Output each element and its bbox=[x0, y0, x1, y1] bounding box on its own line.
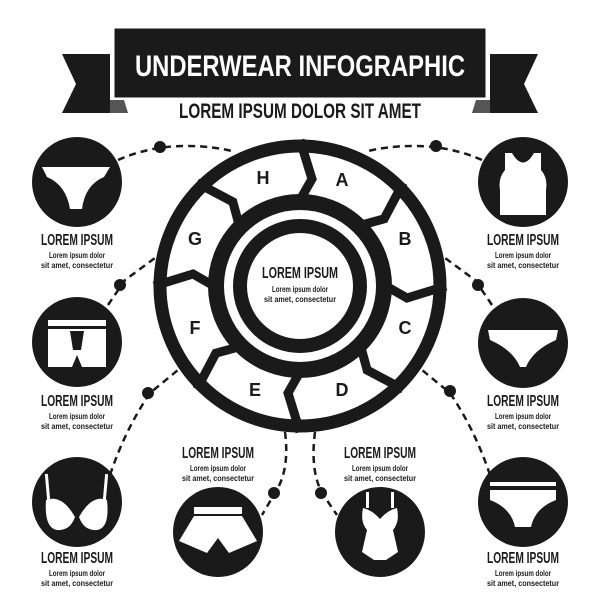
label: top-left: sit amet, consectetur bbox=[41, 260, 114, 270]
label: mid-left: Lorem ipsum dolor bbox=[49, 411, 105, 421]
title: UNDERWEAR INFOGRAPHIC bbox=[135, 50, 465, 83]
label: bottom-right: Lorem ipsum dolor bbox=[495, 568, 551, 578]
central wheel: E bbox=[249, 380, 261, 400]
label: bottom-mid-right bbox=[344, 445, 417, 483]
label: bottom-mid-right: LOREM IPSUM bbox=[344, 445, 416, 462]
label: mid-right: LOREM IPSUM bbox=[487, 393, 559, 410]
label: top-right bbox=[487, 232, 560, 270]
label: top-left: Lorem ipsum dolor bbox=[49, 250, 105, 260]
icon: boxer shorts bbox=[48, 320, 106, 367]
label: bottom-mid-left: Lorem ipsum dolor bbox=[190, 463, 246, 473]
icon: bodysuit bbox=[362, 492, 398, 560]
text blocks bbox=[41, 232, 560, 588]
icon: briefs with band bbox=[490, 482, 556, 527]
central wheel: G bbox=[188, 229, 202, 249]
icon circles bbox=[32, 137, 568, 577]
icon: loose shorts bbox=[179, 507, 257, 553]
label: top-right: sit amet, consectetur bbox=[487, 260, 560, 270]
connectors bbox=[108, 146, 492, 515]
label: bottom-mid-right: Lorem ipsum dolor bbox=[352, 463, 408, 473]
center text: sit amet, consectetur bbox=[264, 294, 337, 304]
icon: tank top bbox=[500, 153, 546, 215]
label: bottom-left bbox=[41, 550, 114, 588]
banner ribbon bbox=[62, 28, 538, 113]
central wheel: H bbox=[256, 168, 270, 188]
central wheel: C bbox=[398, 318, 412, 338]
center text: Lorem ipsum dolor bbox=[272, 284, 328, 294]
label: mid-right: sit amet, consectetur bbox=[487, 421, 560, 431]
label: top-left: LOREM IPSUM bbox=[41, 232, 113, 249]
center text bbox=[262, 265, 338, 304]
label: bottom-mid-right: sit amet, consectetur bbox=[344, 473, 417, 483]
icon: bra bbox=[45, 474, 108, 530]
icon: briefs bbox=[42, 167, 110, 209]
label: bottom-mid-left bbox=[182, 445, 255, 483]
central wheel: D bbox=[336, 380, 348, 400]
label: mid-right: Lorem ipsum dolor bbox=[495, 411, 551, 421]
connector dots bbox=[114, 140, 484, 499]
label: mid-right bbox=[487, 393, 560, 431]
label: bottom-mid-left: LOREM IPSUM bbox=[182, 445, 254, 462]
label: mid-left: sit amet, consectetur bbox=[41, 421, 114, 431]
label: top-right: Lorem ipsum dolor bbox=[495, 250, 551, 260]
label: mid-left bbox=[41, 393, 114, 431]
icon: lace panties bbox=[488, 330, 558, 367]
central wheel: B bbox=[398, 229, 412, 249]
label: bottom-left: sit amet, consectetur bbox=[41, 578, 114, 588]
central wheel: A bbox=[336, 170, 348, 190]
label: top-right: LOREM IPSUM bbox=[487, 232, 559, 249]
label: bottom-mid-left: sit amet, consectetur bbox=[182, 473, 255, 483]
center text: LOREM IPSUM bbox=[262, 265, 338, 282]
label: bottom-right bbox=[487, 550, 560, 588]
subtitle: LOREM IPSUM DOLOR SIT AMET bbox=[179, 100, 421, 123]
central wheel: F bbox=[190, 318, 200, 338]
label: bottom-left: Lorem ipsum dolor bbox=[49, 568, 105, 578]
label: bottom-right: sit amet, consectetur bbox=[487, 578, 560, 588]
label: top-left bbox=[41, 232, 114, 270]
label: bottom-right: LOREM IPSUM bbox=[487, 550, 559, 567]
central wheel bbox=[154, 140, 446, 432]
label: bottom-left: LOREM IPSUM bbox=[41, 550, 113, 567]
label: mid-left: LOREM IPSUM bbox=[41, 393, 113, 410]
